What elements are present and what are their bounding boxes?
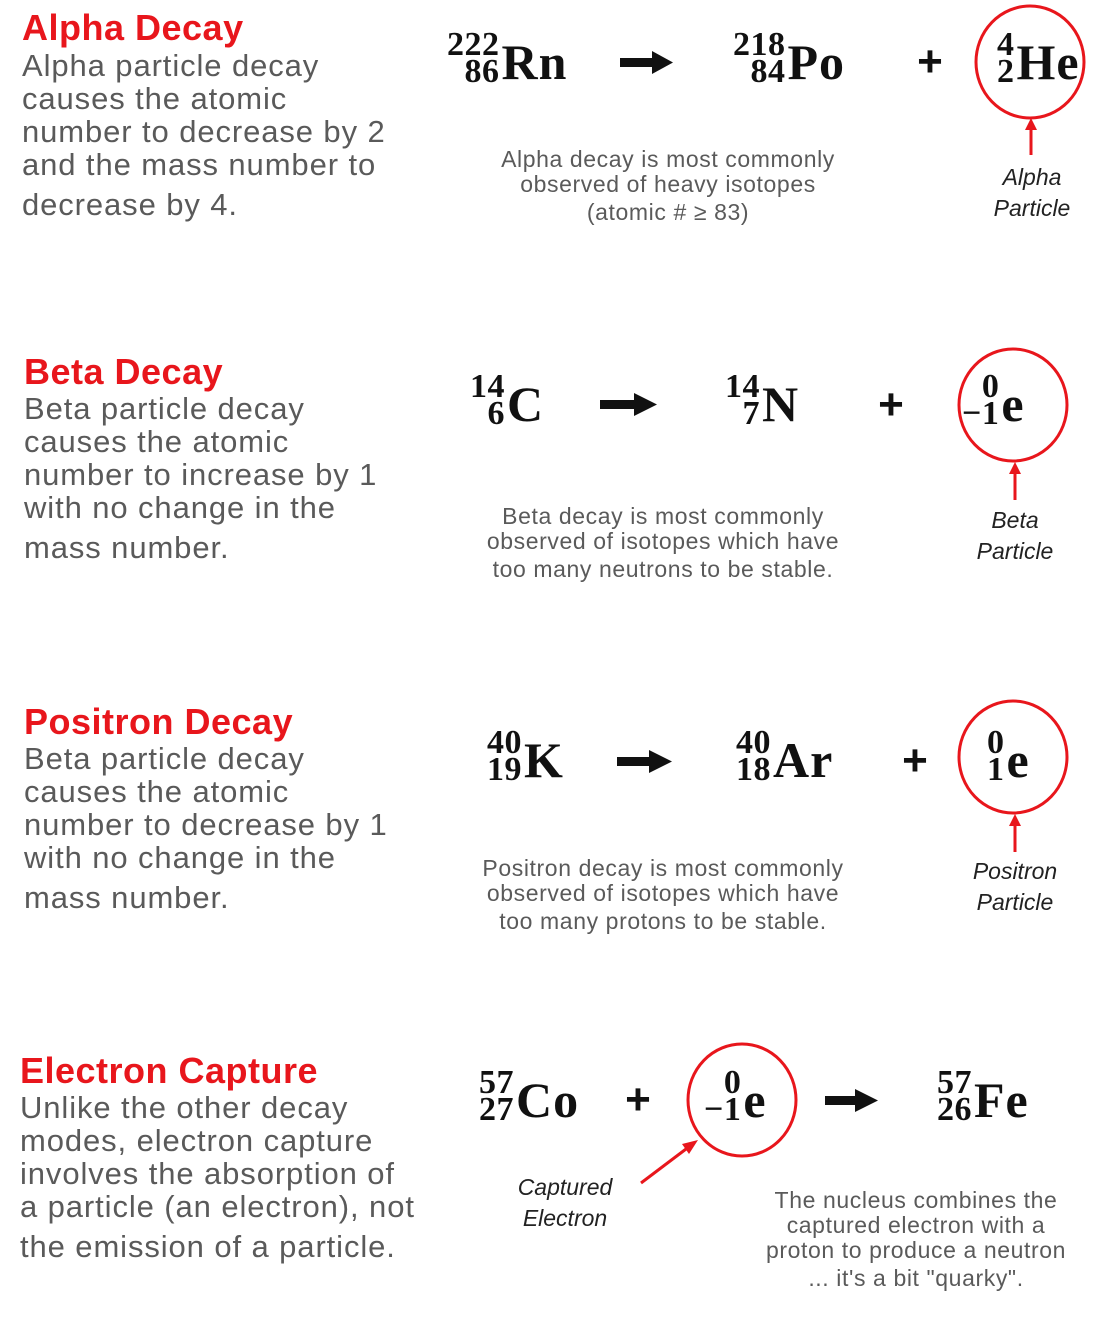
panel: positron decay [24,700,1068,934]
nuclide: He: He [1016,34,1080,90]
nuclide: e-: −1 [704,1091,741,1128]
nuclide: e: e [1001,376,1025,432]
nuclide: Fe [937,1064,1029,1128]
plus: + [917,37,943,86]
circle: captured electron [688,1044,796,1156]
panel: electron capture [20,1042,1066,1291]
text block: alpha description: decrease by 4. [22,187,238,222]
text block: EC description: modes, electron capture [20,1123,373,1158]
nuclide: N: N [762,376,799,432]
panel: beta decay [24,348,1068,582]
nuclide: e+ [987,724,1030,788]
label: positron particle: Particle [977,889,1053,915]
caption: beta: too many neutrons to be stable. [493,556,833,582]
plus: + [878,380,904,429]
text block: alpha description: number to decrease by 2 [22,114,386,149]
caption: EC: proton to produce a neutron [766,1237,1066,1263]
text block: EC description: involves the absorption of [20,1156,395,1191]
circle: positron [959,701,1067,813]
nuclide: Rn: Rn [502,34,567,90]
caption: alpha: Alpha decay is most commonly [501,146,835,172]
label: beta particle: Particle [977,538,1053,564]
nuclide: C: C [507,376,544,432]
nuclide: e [962,368,1025,432]
caption: positron: observed of isotopes which have [487,880,839,906]
caption: EC: captured electron with a [787,1212,1045,1238]
caption: alpha [501,146,835,225]
nuclide: Co: Co [516,1072,579,1128]
circle: beta particle [959,349,1067,461]
nuclide: e-: e [743,1072,767,1128]
text block: EC description [20,1090,415,1264]
nuclide: C: 14 [470,368,505,405]
text block: beta description: number to increase by 1 [24,457,377,492]
nuclide: K: 40 [487,724,522,761]
nuclide: Ar: Ar [773,732,833,788]
nuclide: N [725,368,799,432]
arrow: reaction [825,1089,878,1112]
label: alpha particle [994,164,1070,221]
nuclide: He: 4 [997,26,1014,63]
nuclide: Ar [736,724,833,788]
arrow: reaction [620,51,673,74]
text block: positron description [24,741,388,915]
nuclide: e: −1 [962,395,999,432]
arrow: reaction [617,750,672,773]
caption: beta [487,503,839,582]
label: captured electron: Electron [523,1205,607,1231]
text block: EC description: a particle (an electron), not [20,1189,415,1224]
label: positron particle: Positron [973,858,1057,884]
circle: alpha particle [976,6,1084,118]
text block: positron description: mass number. [24,880,230,915]
text block: alpha description [22,48,386,222]
text block: alpha description: causes the atomic [22,81,287,116]
nuclide: e-: 0 [724,1064,741,1101]
caption: positron: Positron decay is most commonly [482,855,844,881]
caption: EC [766,1187,1066,1291]
caption: alpha: (atomic # ≥ 83) [587,199,749,225]
text block: beta description: mass number. [24,530,230,565]
label: positron particle [973,858,1057,915]
text block: positron description: number to decrease by 1 [24,807,388,842]
label: alpha particle: Particle [994,195,1070,221]
panel: alpha decay [22,4,1086,225]
caption: EC: ... it's a bit "quarky". [808,1265,1024,1291]
arrow: pointer [1025,118,1037,155]
nuclide: K [487,724,564,788]
nuclide: Rn: 222 [447,26,500,63]
caption: EC: The nucleus combines the [775,1187,1057,1213]
text block: beta description: Beta particle decay [24,391,305,426]
caption: beta: observed of isotopes which have [487,528,839,554]
arrow: pointer [1009,814,1021,852]
nuclide: Co [479,1064,579,1128]
text block: EC description: Unlike the other decay [20,1090,348,1125]
nuclide: N: 14 [725,368,760,405]
heading: electron capture: Electron Capture [20,1050,318,1091]
arrow: pointer [1009,462,1021,500]
nuclide: Fe: Fe [974,1072,1029,1128]
nuclide: Rn [447,26,567,90]
caption: positron [482,855,844,934]
nuclide: Co: 27 [479,1091,514,1128]
nuclide: C [470,368,544,432]
nuclide: Ar: 40 [736,724,771,761]
label: beta particle [977,507,1053,564]
text block: positron description: with no change in the [24,840,336,875]
nuclide: e+: 0 [987,724,1004,761]
label: alpha particle: Alpha [1003,164,1061,190]
text block: alpha description: Alpha particle decay [22,48,319,83]
label: beta particle: Beta [991,507,1039,533]
nuclide: e+: 1 [987,751,1004,788]
nuclide: e+: e [1006,732,1030,788]
nuclide: e: 0 [982,368,999,405]
nuclide: e- [704,1064,767,1128]
arrow: pointer diagonal [641,1140,698,1183]
nuclide: C: 6 [488,395,505,432]
text block: positron description: causes the atomic [24,774,289,809]
plus: + [902,736,928,785]
text block: positron description: Beta particle decay [24,741,305,776]
nuclide: Ar: 18 [736,751,771,788]
nuclide: Fe: 57 [937,1064,972,1101]
nuclide: K: K [524,732,564,788]
heading: alpha decay: Alpha Decay [22,7,244,48]
nuclide: He [997,26,1080,90]
caption: beta: Beta decay is most commonly [502,503,824,529]
caption: positron: too many protons to be stable. [499,908,827,934]
plus: + [625,1075,651,1124]
text block: beta description: causes the atomic [24,424,289,459]
heading: positron decay: Positron Decay [24,701,293,742]
nuclide: Po [733,26,845,90]
nuclide: Fe: 26 [937,1091,972,1128]
nuclide: N: 7 [742,395,760,432]
arrow: reaction [600,393,657,416]
nuclide: Po: 84 [750,53,786,90]
nuclide: Co: 57 [479,1064,514,1101]
text block: alpha description: and the mass number to [22,147,376,182]
nuclide: Po: 218 [733,26,786,63]
equation graphics: alpha [620,4,1086,155]
heading: beta decay: Beta Decay [24,351,223,392]
text block: EC description: the emission of a particle. [20,1229,396,1264]
label: captured electron [518,1174,613,1231]
text block: beta description: with no change in the [24,490,336,525]
nuclide: He: 2 [997,53,1014,90]
nuclide: Rn: 86 [464,53,500,90]
caption: alpha: observed of heavy isotopes [520,171,816,197]
nuclide: Po: Po [788,34,845,90]
text block: beta description [24,391,377,565]
label: captured electron: Captured [518,1174,612,1200]
nuclide: K: 19 [487,751,522,788]
